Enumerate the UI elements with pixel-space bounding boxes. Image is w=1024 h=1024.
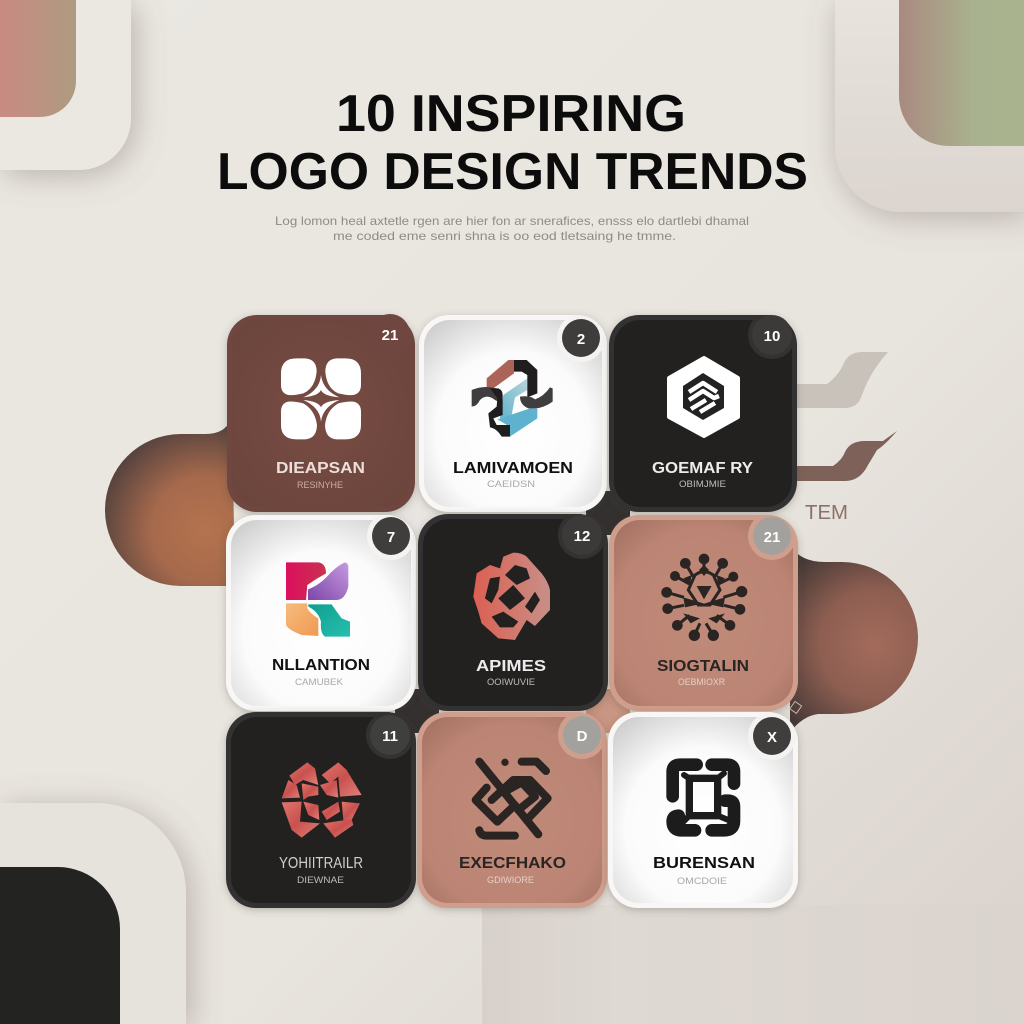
icon: colour blocks — [286, 562, 350, 637]
bird shape: light — [790, 352, 888, 408]
name: NLLANTION — [272, 657, 370, 674]
badge 21: 21 — [764, 529, 780, 546]
sub label: CAMUBEK — [295, 677, 343, 687]
badge 12: 12 — [574, 528, 590, 545]
icon: linked square — [673, 765, 734, 830]
card 8: EXECFHAKO — [417, 711, 607, 908]
title — [217, 85, 808, 201]
badge 21 — [370, 314, 410, 354]
bird shape: dark — [790, 431, 897, 481]
badge 21: 21 — [382, 327, 398, 344]
badge 10: 10 — [764, 328, 780, 345]
icon: interlaced strokes — [476, 759, 548, 836]
badge X — [753, 717, 791, 755]
icon: folded ribbon — [472, 360, 553, 437]
name: BURENSAN — [653, 855, 755, 872]
badge 7: 7 — [387, 529, 395, 546]
badge 10 — [752, 315, 792, 355]
card 9: BURENSAN — [608, 712, 798, 908]
badge 2: 2 — [577, 331, 585, 348]
card 4: NLLANTION — [226, 512, 416, 711]
icon: hexagon — [669, 358, 738, 436]
card 3: GOEMAF RY — [609, 311, 797, 512]
badge 11: 11 — [382, 728, 398, 745]
badge 11 — [370, 715, 410, 755]
sub label: RESINYHE — [297, 480, 343, 490]
sub label: OOIWUVIE — [487, 677, 535, 687]
card 2: LAMIVAMOEN — [419, 314, 607, 512]
label: TEM: TEM — [805, 502, 848, 524]
card 7: YOHIITRAILR — [226, 711, 416, 908]
decorative corner: bottom left — [0, 803, 186, 1024]
badge D — [563, 716, 601, 754]
card 5: APIMES — [418, 511, 608, 711]
icon: radial burst — [661, 554, 747, 641]
icon: red faceted flower — [282, 762, 362, 838]
badge 7 — [372, 517, 410, 555]
name: LAMIVAMOEN — [453, 460, 573, 477]
sub label: OEBMIOXR — [678, 677, 725, 687]
sub label: OBIMJMIE — [679, 479, 726, 489]
subtitle: me coded eme senri shna is oo eod tletsaing he tmme. — [333, 229, 676, 243]
right brown blob — [790, 545, 918, 732]
title: LOGO DESIGN TRENDS — [217, 143, 808, 201]
icon: four petals — [281, 358, 361, 439]
badge X: X — [767, 729, 777, 746]
sub label: GDIWIORE — [487, 875, 534, 885]
badge 12 — [562, 515, 602, 555]
title: 10 INSPIRING — [336, 85, 686, 143]
name: APIMES — [476, 658, 546, 675]
name: YOHIITRAILR — [279, 855, 363, 872]
left brown blob — [105, 415, 235, 586]
card 6: SIOGTALIN — [609, 512, 798, 711]
name: EXECFHAKO — [459, 855, 566, 872]
decorative corner: top left — [0, 0, 131, 170]
icon: coral flower — [473, 553, 550, 640]
card 1: DIEAPSAN — [227, 310, 415, 512]
name: GOEMAF RY — [652, 460, 753, 477]
badge 21 — [753, 517, 791, 555]
subtitle: Log lomon heal axtetle rgen are hier fon ar snerafices, ensss elo dartlebi dhamal — [275, 214, 749, 228]
name: SIOGTALIN — [657, 658, 749, 675]
bottom background panel — [482, 905, 1024, 1024]
small tab icon — [790, 701, 802, 713]
junction plates behind cards — [395, 491, 630, 733]
sub label: DIEWNAE — [297, 875, 344, 885]
sub label: CAEIDSN — [487, 479, 535, 489]
badge D: D — [577, 728, 588, 745]
badge 2 — [562, 319, 600, 357]
subtitle — [275, 214, 749, 243]
name: DIEAPSAN — [276, 460, 365, 477]
decorative corner: top right — [835, 0, 1024, 212]
sub label: OMCDOIE — [677, 876, 727, 886]
